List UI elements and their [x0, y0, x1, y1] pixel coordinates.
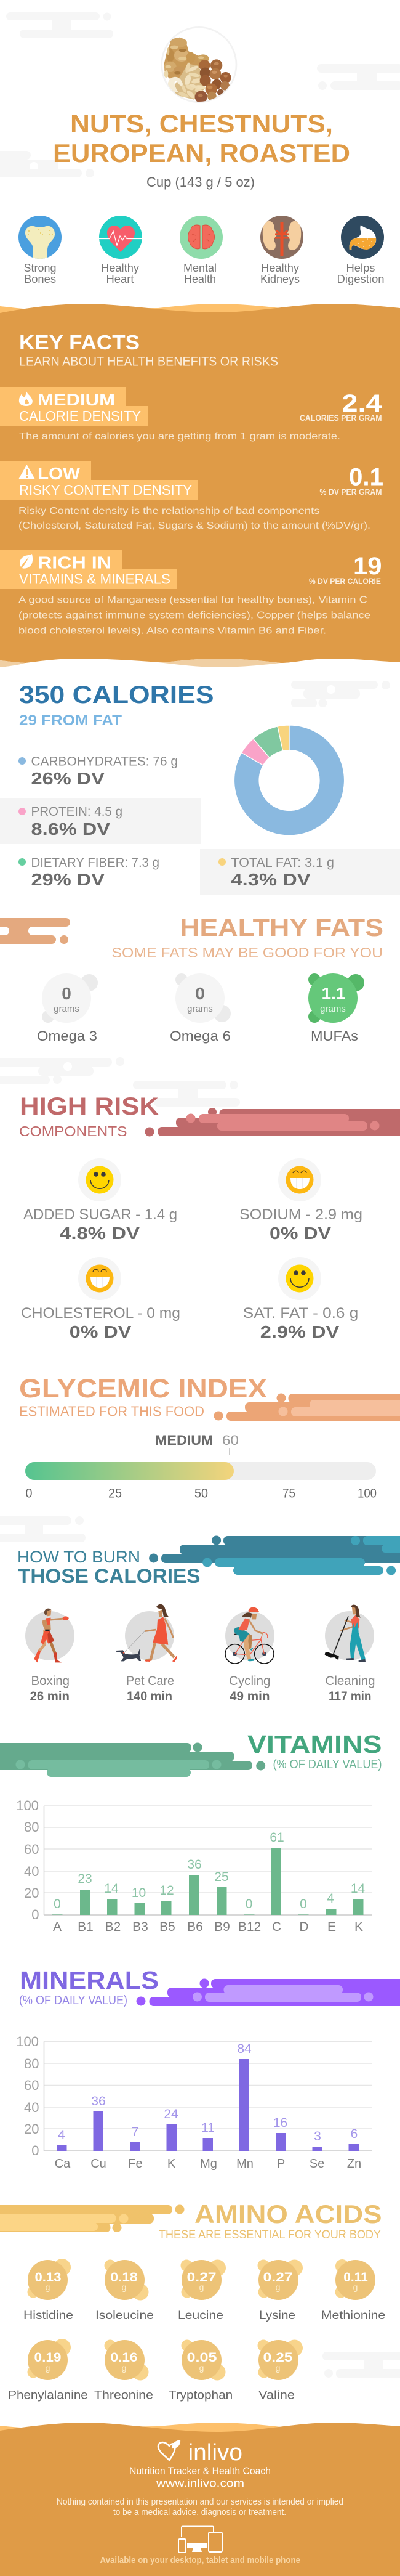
legend: carbohydrates: 26% DV	[31, 769, 105, 788]
legend: total fat: 4.3% DV	[231, 870, 311, 889]
figure: cyclist	[225, 1607, 274, 1664]
benefit labels: Strong	[23, 262, 57, 274]
bar chart: minerals: 24	[164, 2107, 178, 2121]
bar chart: minerals: 11	[201, 2121, 215, 2135]
bar chart: vitamins: 80	[24, 1819, 39, 1835]
amino: tryptophan	[169, 2340, 233, 2402]
amino: phenylalanine: g	[46, 2363, 50, 2373]
bar chart: vitamins: 25	[214, 1870, 229, 1884]
decorative bars: high risk	[145, 1108, 400, 1136]
bar chart: minerals: 6	[351, 2127, 358, 2141]
component: added sugar: 4.8% DV	[60, 1224, 140, 1243]
rich in vitamins and minerals: 19	[353, 553, 382, 580]
calorie density: CALORIE DENSITY	[19, 408, 141, 424]
amino: isoleucine: Isoleucine	[95, 2309, 154, 2322]
activity: cleaning: Cleaning	[325, 1674, 375, 1688]
amino: leucine: g	[199, 2282, 204, 2292]
legend: total fat	[200, 849, 400, 895]
icon: warning	[18, 465, 35, 479]
bar chart: vitamins: B12	[238, 1920, 261, 1934]
heading: key facts: LEARN ABOUT HEALTH BENEFITS OR RISKS	[19, 355, 278, 368]
icon: smile	[286, 1264, 314, 1293]
bar chart: vitamins: B9	[214, 1920, 230, 1934]
component: cholesterol: CHOLESTEROL - 0 mg	[21, 1305, 180, 1322]
risky content density: LOW	[38, 464, 81, 483]
activity: cycling	[225, 1607, 274, 1704]
amino: threonine: Threonine	[94, 2389, 153, 2402]
amino: isoleucine	[95, 2260, 154, 2322]
bar chart: minerals: 7	[132, 2125, 138, 2139]
gauge axis: 75	[282, 1486, 295, 1501]
panel: how to burn those calories	[17, 1535, 400, 1704]
amino: methionine	[321, 2259, 385, 2322]
bar chart: vitamins: B6	[187, 1920, 203, 1934]
amino: lysine: g	[276, 2282, 280, 2292]
bar chart: minerals: Mn	[236, 2157, 254, 2171]
legend: total fat: TOTAL FAT: 3.1 g	[231, 856, 334, 870]
calorie density: 2.4	[342, 390, 382, 417]
heading: amino acids	[159, 2200, 382, 2241]
gauge value	[155, 1432, 239, 1455]
heading: burn: HOW TO BURN	[17, 1548, 140, 1566]
amino: valine: Valine	[258, 2389, 295, 2402]
amino: lysine: Lysine	[259, 2309, 295, 2322]
bar chart: vitamins: 14	[104, 1882, 119, 1896]
heading: glycemic index: ESTIMATED FOR THIS FOOD	[19, 1404, 204, 1420]
fat: omega 6: 0	[195, 984, 205, 1003]
legend: dietary fiber: DIETARY FIBER: 7.3 g	[31, 856, 159, 870]
title: NUTS, CHESTNUTS,	[70, 109, 333, 138]
bar chart: vitamins: A	[53, 1920, 62, 1934]
availability note: Available on your desktop, tablet and mobile phone	[100, 2555, 300, 2566]
calorie density: CALORIES PER GRAM	[300, 413, 382, 423]
risky content density: Risky Content density is the relationship of bad components	[18, 506, 320, 516]
gauge axis: 0	[26, 1486, 32, 1501]
gauge bar	[25, 1462, 376, 1480]
risky content density	[0, 461, 383, 531]
amino: lysine: 0.27	[263, 2270, 293, 2285]
heading: high risk	[19, 1093, 159, 1139]
activity: cycling: Cycling	[229, 1674, 271, 1688]
figure: cleaner	[325, 1605, 366, 1662]
icon: grin	[286, 1166, 314, 1194]
amino: threonine: g	[122, 2363, 126, 2373]
disclaimer	[57, 2497, 343, 2517]
heading: vitamins: VITAMINS	[247, 1730, 382, 1758]
benefit labels	[23, 262, 384, 285]
bar chart: minerals: P	[277, 2157, 285, 2171]
bar chart: vitamins: C	[272, 1920, 281, 1934]
amino: valine: 0.25	[263, 2350, 293, 2365]
bar chart: vitamins: 60	[24, 1842, 39, 1857]
rich in vitamins and minerals: % DV PER CALORIE	[309, 577, 381, 586]
activity: cycling: 49 min	[230, 1689, 270, 1704]
bar chart: minerals: 16	[273, 2116, 287, 2130]
fat: omega 3: 0	[62, 984, 71, 1003]
bar chart: vitamins: 40	[24, 1864, 39, 1879]
legend: protein: PROTEIN: 4.5 g	[31, 805, 122, 819]
amino: histidine: 0.13	[34, 2270, 62, 2285]
bar chart: minerals: 0	[31, 2143, 39, 2158]
fat: mufas: MUFAs	[311, 1028, 358, 1044]
bar chart: minerals: 40	[24, 2100, 39, 2115]
amino: phenylalanine: 0.19	[34, 2350, 62, 2365]
bar chart: vitamins: 20	[24, 1885, 39, 1901]
fat: omega 3: Omega 3	[37, 1028, 97, 1044]
bar chart: minerals: 60	[24, 2078, 39, 2093]
component: cholesterol: 0% DV	[70, 1322, 132, 1341]
rich in vitamins and minerals: VITAMINS & MINERALS	[19, 571, 170, 587]
bar chart: minerals: Mg	[200, 2157, 217, 2171]
icon: mental health	[180, 216, 223, 259]
risky content density: 0.1	[349, 463, 383, 490]
amino: isoleucine: g	[122, 2282, 126, 2292]
gauge value: MEDIUM	[155, 1432, 213, 1448]
heading: calories: 29 FROM FAT	[19, 712, 122, 729]
icon: devices	[178, 2526, 222, 2553]
bar chart: minerals: K	[167, 2157, 176, 2171]
component: saturated fat: 2.9% DV	[260, 1322, 340, 1341]
tagline and website: Nutrition Tracker & Health Coach	[129, 2465, 271, 2477]
icon: helps digestion	[341, 216, 384, 259]
decorative bars: burn	[149, 1535, 400, 1575]
risky content density: RISKY CONTENT DENSITY	[19, 482, 192, 498]
legend: carbohydrates: CARBOHYDRATES: 76 g	[31, 754, 178, 769]
bar chart: vitamins: B1	[78, 1920, 94, 1934]
panel: amino acids	[0, 2200, 385, 2402]
heading: minerals: MINERALS	[20, 1966, 159, 1994]
benefit labels: Health	[184, 273, 216, 285]
amino: lysine	[257, 2260, 303, 2322]
heading: vitamins: (% OF DAILY VALUE)	[273, 1758, 382, 1771]
activity: pet care: Pet Care	[126, 1674, 174, 1688]
activity: cleaning: 117 min	[329, 1689, 372, 1704]
bar chart: vitamins: B2	[105, 1920, 121, 1934]
heading: key facts	[19, 331, 278, 368]
heading: minerals: (% OF DAILY VALUE)	[19, 1994, 127, 2007]
heading: high risk: COMPONENTS	[19, 1123, 127, 1139]
title: EUROPEAN, ROASTED	[53, 139, 350, 168]
serving size: Cup (143 g / 5 oz)	[146, 174, 255, 190]
bar chart: minerals: 80	[24, 2056, 39, 2071]
heading: burn	[17, 1548, 201, 1587]
disclaimer: to be a medical advice, diagnosis or treatment.	[113, 2508, 286, 2517]
decorative bars: glycemic	[214, 1394, 400, 1421]
bar chart: vitamins: 12	[159, 1883, 174, 1898]
amino: histidine	[23, 2259, 73, 2322]
bar chart: vitamins: 0	[54, 1897, 61, 1911]
panel: healthy fats	[0, 914, 383, 1044]
bar chart: vitamins: 0	[31, 1907, 39, 1922]
component: added sugar: ADDED SUGAR - 1.4 g	[23, 1206, 177, 1223]
decorative bars: amino acids	[0, 2204, 185, 2232]
panel: high risk components	[19, 1093, 400, 1341]
amino: methionine: 0.11	[343, 2270, 368, 2285]
figure: dog walker	[116, 1604, 177, 1662]
bar chart: vitamins: 61	[270, 1830, 284, 1845]
benefit labels: Bones	[24, 273, 56, 285]
amino: phenylalanine	[8, 2339, 88, 2402]
bar chart: minerals: Cu	[90, 2157, 106, 2171]
legend: protein	[0, 798, 201, 844]
risky content density: (Cholesterol, Saturated Fat, Sugars & Sodium) to the amount (%DV/gr).	[18, 521, 370, 531]
fat: omega 6	[170, 973, 231, 1044]
calorie density	[0, 387, 382, 442]
rich in vitamins and minerals: (protects against immune system deficiencies), Copper (helps balance	[18, 610, 370, 621]
fat: omega 6: grams	[187, 1004, 213, 1014]
heading: healthy fats	[112, 914, 383, 961]
activity: boxing	[25, 1609, 74, 1704]
legend: protein: 8.6% DV	[31, 819, 110, 839]
heading: calories	[19, 681, 214, 729]
heading: minerals	[19, 1966, 159, 2007]
fat: mufas: grams	[320, 1004, 346, 1014]
rich in vitamins and minerals	[0, 550, 382, 636]
amino: threonine: 0.16	[111, 2350, 138, 2365]
logo: inlivo	[158, 2440, 242, 2466]
risky content density: % DV PER GRAM	[320, 487, 382, 497]
component: added sugar	[23, 1158, 177, 1243]
bar chart: minerals: 100	[16, 2034, 39, 2049]
benefit labels: Healthy	[101, 262, 139, 274]
amino: tryptophan: 0.05	[187, 2350, 217, 2365]
decorative bars: healthy fats	[0, 918, 71, 944]
gauge value: 60	[222, 1432, 239, 1448]
bar chart: vitamins: 0	[246, 1897, 252, 1911]
calorie density: MEDIUM	[38, 390, 115, 409]
benefit labels: Digestion	[337, 273, 384, 285]
heading: vitamins	[247, 1730, 382, 1771]
rich in vitamins and minerals: A good source of Manganese (essential for healthy bones), Vitamin C	[18, 595, 367, 605]
benefit labels: Kidneys	[260, 273, 300, 285]
logo: inlivo: inlivo	[188, 2440, 242, 2466]
icon: smile	[86, 1166, 113, 1194]
component: sodium: 0% DV	[270, 1224, 331, 1243]
bar chart: vitamins: 14	[351, 1882, 365, 1896]
disclaimer: Nothing contained in this presentation and our services is intended or implied	[57, 2497, 343, 2507]
calorie density: The amount of calories you are getting from 1 gram is moderate.	[19, 431, 340, 442]
title	[53, 109, 350, 168]
legend: carbohydrates	[18, 754, 178, 788]
amino: phenylalanine: Phenylalanine	[8, 2389, 88, 2402]
benefit labels: Mental	[183, 262, 217, 274]
bar chart: vitamins: 10	[132, 1886, 146, 1900]
heading: amino acids: THESE ARE ESSENTIAL FOR YOUR BODY	[159, 2228, 381, 2241]
panel: key facts	[0, 304, 400, 667]
amino: threonine	[94, 2340, 153, 2402]
amino: methionine: g	[353, 2282, 358, 2292]
heading: healthy fats: SOME FATS MAY BE GOOD FOR YOU	[112, 945, 383, 961]
fat: mufas	[308, 973, 364, 1044]
icon: strong bones	[18, 216, 62, 262]
amino: valine: g	[276, 2363, 280, 2373]
icon: leaf	[20, 554, 33, 569]
bar chart: minerals: Zn	[347, 2157, 361, 2171]
bar chart: minerals: 4	[58, 2128, 65, 2142]
gauge axis: 50	[194, 1486, 208, 1501]
donut chart	[234, 725, 345, 835]
amino: isoleucine: 0.18	[111, 2270, 138, 2285]
heading: amino acids: AMINO ACIDS	[194, 2200, 382, 2229]
panel: glycemic index	[19, 1374, 400, 1501]
amino: leucine	[178, 2260, 226, 2322]
fat: omega 6: Omega 6	[170, 1028, 231, 1044]
tagline and website: www.inlivo.com	[156, 2477, 244, 2489]
activity: pet care: 140 min	[127, 1689, 172, 1704]
heading: burn: THOSE CALORIES	[18, 1565, 201, 1587]
component: cholesterol	[21, 1257, 180, 1341]
bar chart: vitamins: 0	[300, 1897, 307, 1911]
icon: healthy heart	[99, 216, 142, 259]
rich in vitamins and minerals: RICH IN	[38, 553, 111, 572]
component: sodium	[239, 1158, 362, 1243]
amino: leucine: Leucine	[178, 2309, 223, 2322]
panel: vitamins	[0, 1730, 382, 1934]
amino: tryptophan: g	[199, 2363, 204, 2373]
fat: omega 3: grams	[54, 1004, 79, 1014]
activity: boxing: 26 min	[30, 1689, 70, 1704]
tagline and website	[129, 2465, 271, 2489]
bar chart: vitamins: K	[354, 1920, 363, 1934]
bar chart: vitamins: 4	[327, 1891, 334, 1906]
heading: key facts: KEY FACTS	[19, 331, 140, 354]
component: sodium: SODIUM - 2.9 mg	[239, 1206, 362, 1223]
activity: boxing: Boxing	[31, 1674, 70, 1688]
panel: calories	[0, 681, 400, 895]
rich in vitamins and minerals: blood cholesterol levels). Also contains Vitamin B6 and Fiber.	[18, 626, 326, 636]
bar chart: vitamins: 100	[16, 1798, 39, 1813]
legend: dietary fiber: 29% DV	[31, 870, 105, 889]
bar chart: vitamins	[16, 1798, 372, 1934]
amino: tryptophan: Tryptophan	[169, 2389, 233, 2402]
activity: pet care	[116, 1604, 177, 1704]
amino: histidine: Histidine	[23, 2309, 73, 2322]
gauge axis: 100	[358, 1486, 377, 1501]
bar chart: minerals	[16, 2034, 372, 2171]
figure: boxer	[34, 1609, 69, 1662]
panel: minerals	[16, 1966, 400, 2171]
heading: calories: 350 CALORIES	[19, 681, 214, 709]
decorative bars: vitamins	[0, 1742, 265, 1777]
bar chart: minerals: 84	[237, 2042, 252, 2056]
activity: cleaning	[325, 1605, 375, 1704]
fat: mufas: 1.1	[322, 984, 345, 1003]
benefit labels: Heart	[106, 273, 134, 285]
heading: high risk: HIGH RISK	[20, 1093, 159, 1120]
bar chart: minerals: Se	[310, 2157, 324, 2171]
icon: healthy kidneys	[260, 216, 303, 259]
component: saturated fat: SAT. FAT - 0.6 g	[243, 1305, 358, 1322]
bar chart: minerals: 20	[24, 2121, 39, 2137]
bar chart: vitamins: 23	[78, 1872, 92, 1886]
component: saturated fat	[243, 1257, 358, 1341]
icon: flame	[19, 390, 33, 406]
amino: methionine: Methionine	[321, 2309, 385, 2322]
bar chart: vitamins: E	[327, 1920, 336, 1934]
bar chart: vitamins: B5	[159, 1920, 175, 1934]
bar chart: minerals: Ca	[55, 2157, 71, 2171]
decorative bars: minerals	[137, 1979, 400, 2006]
amino: leucine: 0.27	[187, 2270, 217, 2285]
gauge axis	[26, 1486, 377, 1501]
bar chart: vitamins: 36	[187, 1858, 202, 1872]
benefit labels: Helps	[346, 262, 375, 274]
bar chart: vitamins: B3	[132, 1920, 148, 1934]
heading: glycemic index	[19, 1374, 267, 1420]
bar chart: vitamins: D	[299, 1920, 309, 1934]
amino: valine	[257, 2340, 303, 2402]
bar chart: minerals: Fe	[128, 2157, 143, 2171]
health benefit icons	[18, 216, 384, 285]
gauge axis: 25	[108, 1486, 122, 1501]
heading: glycemic index: GLYCEMIC INDEX	[19, 1374, 267, 1404]
icon: grin	[86, 1264, 113, 1293]
legend: dietary fiber	[18, 856, 159, 889]
heading: healthy fats: HEALTHY FATS	[180, 914, 383, 941]
food photo: mixed nuts in a circle	[162, 27, 236, 103]
fat: omega 3	[37, 973, 98, 1044]
footer	[0, 2423, 400, 2576]
bar chart: minerals: 36	[91, 2094, 106, 2108]
amino: histidine: g	[46, 2282, 50, 2292]
benefit labels: Healthy	[261, 262, 299, 274]
bar chart: minerals: 3	[314, 2129, 321, 2143]
